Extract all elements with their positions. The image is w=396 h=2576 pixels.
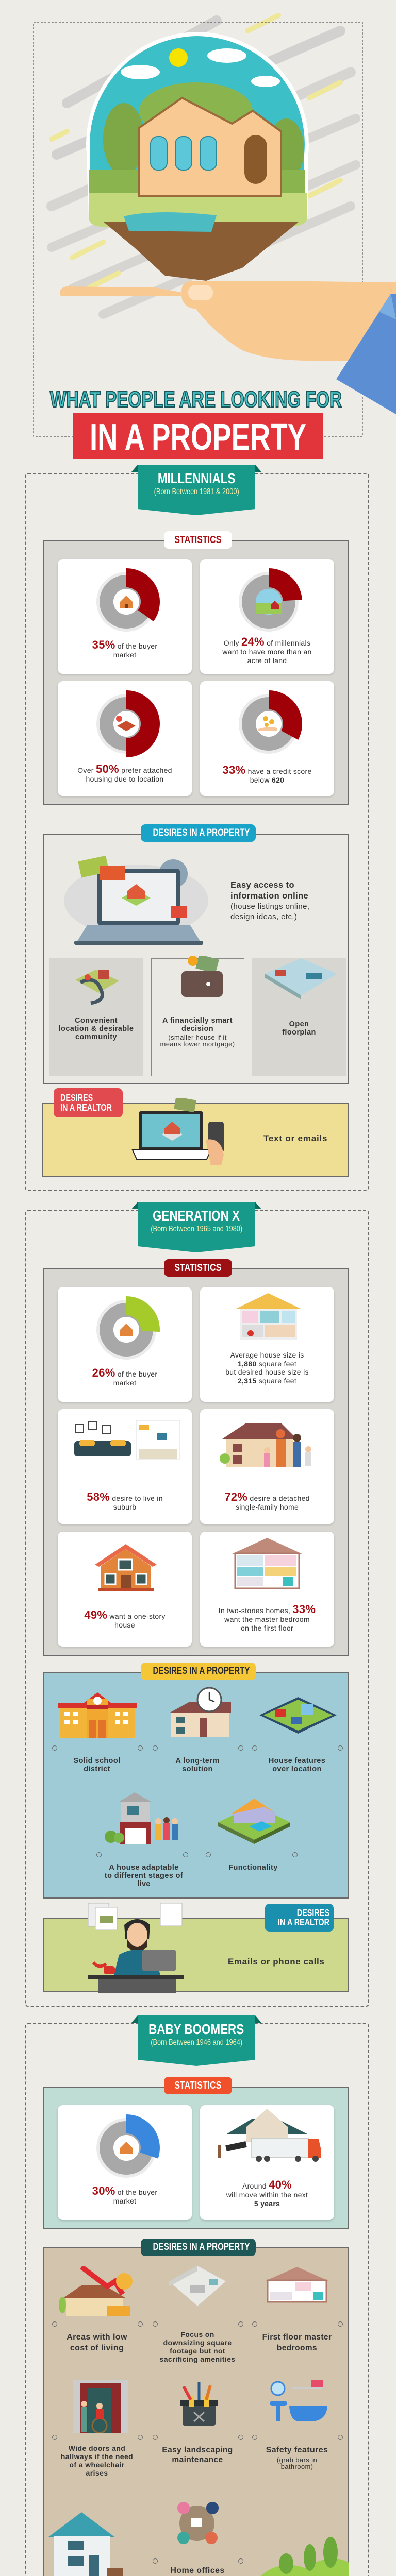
label: desires in a realtor (millennials): DESIRES [60, 1093, 93, 1103]
card: 40% move: 5 years [254, 2199, 280, 2208]
item: downsizing: sacrificing amenities [160, 2355, 235, 2363]
text: text or emails: Text or emails [263, 1133, 327, 1143]
item: low cost of living: Areas with low [67, 2333, 127, 2342]
item: downsizing: Focus on [180, 2330, 214, 2338]
label: desires in a realtor (gen x): DESIRES [297, 1908, 329, 1918]
panel: generation x [25, 1210, 369, 2007]
item: easy landscaping: Easy landscaping [162, 2446, 233, 2454]
label: desires in a property (gen x) [141, 1663, 256, 1680]
card: 72%: 72% desire a detached [224, 1490, 310, 1503]
panel: millennials [25, 473, 369, 1191]
item: low cost of living: cost of living [70, 2344, 124, 2352]
label: desires in a realtor (millennials) [54, 1088, 123, 1117]
item: wide doors: hallways if the need [61, 2452, 133, 2461]
card: house size: Average house size is [230, 1351, 304, 1359]
label: desires in a property (baby boomers) [141, 2239, 256, 2256]
card: 40% move: will move within the next [226, 2191, 308, 2199]
text: easy access: information online [230, 891, 308, 901]
item: downsizing [153, 2266, 243, 2363]
card: house size [200, 1287, 334, 1402]
text: easy access: Easy access to [230, 880, 294, 890]
label: desires in a property (millennials) [141, 824, 256, 842]
card: 50%: Over 50% prefer attached [77, 762, 172, 775]
item: easy landscaping [153, 2382, 243, 2464]
label: statistics (baby boomers) [164, 2077, 232, 2094]
item: safety features: bathroom) [281, 2463, 313, 2470]
icon: laptop and phone [132, 1098, 224, 1165]
item: open floorplan: Open [289, 1020, 309, 1028]
item: open floorplan [252, 958, 346, 1076]
item: adaptable house [96, 1792, 188, 1888]
panel: gen x desires in a realtor [43, 1918, 349, 1992]
item: financially smart [151, 958, 244, 1076]
item: long-term solution: A long-term [175, 1757, 220, 1765]
item: convenient location: Convenient [75, 1016, 118, 1025]
card: house size: 1,880 square feet [238, 1359, 296, 1367]
icon: house decoration [48, 2512, 123, 2576]
item: open floorplan: floorplan [282, 1028, 316, 1037]
item: safety features: Safety features [266, 2446, 328, 2454]
text: easy access [230, 880, 309, 921]
item: first floor master: bedrooms [277, 2344, 317, 2352]
item: convenient location: location & desirable [59, 1025, 134, 1033]
panel: millennials desires in a property [43, 834, 349, 1084]
label: desires in a property (millennials): DESIRES IN A PROPERTY [153, 827, 250, 838]
label: statistics (millennials): STATISTICS [175, 534, 221, 546]
item: convenient location [50, 958, 143, 1076]
item: downsizing: downsizing square [163, 2338, 232, 2347]
item: financially smart: (smaller house if it [168, 1033, 227, 1041]
item: long-term solution: solution [182, 1765, 213, 1773]
banner: generation x: (Born Between 1965 and 1980) [151, 1225, 242, 1233]
panel: baby boomers statistics [43, 2087, 349, 2229]
card: 50% [58, 681, 192, 796]
card: 26% [58, 1287, 192, 1402]
card: 72% [200, 1409, 334, 1524]
icon: trees decoration [261, 2537, 349, 2576]
text: easy access: (house listings online, [230, 902, 309, 911]
card: 35%: 35% of the buyer [92, 638, 157, 651]
card: 30%: 30% of the buyer [92, 2184, 157, 2197]
item: adaptable house: to different stages of [105, 1872, 183, 1880]
card: 26%: 26% of the buyer [92, 1366, 157, 1379]
item: adaptable house: live [137, 1880, 151, 1888]
item: solid school district: district [84, 1765, 110, 1773]
item: downsizing: footage but not [170, 2347, 225, 2355]
card: house size: but desired house size is [225, 1368, 309, 1376]
text: emails or phone calls: Emails or phone calls [228, 1957, 324, 1967]
item: home offices [153, 2502, 243, 2575]
card: 40% move [200, 2105, 334, 2220]
item: house features: House features [269, 1757, 325, 1765]
label: desires in a property (gen x): DESIRES IN A PROPERTY [153, 1666, 250, 1676]
banner: baby boomers: (Born Between 1946 and 1964) [151, 2038, 242, 2047]
item: house features: over location [272, 1765, 322, 1773]
card: 24%: Only 24% of millennials [224, 635, 310, 648]
label: statistics (gen x): STATISTICS [175, 1262, 221, 1274]
item: solid school district: Solid school [73, 1757, 121, 1765]
panel: baby boomers [25, 2023, 369, 2576]
card: house size: 2,315 square feet [238, 1377, 296, 1385]
title [50, 387, 342, 459]
item: house features [252, 1697, 343, 1773]
label: statistics (gen x) [164, 1259, 232, 1277]
item: home offices: Home offices [170, 2566, 225, 2575]
item: easy landscaping: maintenance [172, 2455, 223, 2464]
panel: generation x statistics [43, 1268, 349, 1656]
card: 49% [58, 1532, 192, 1647]
item: functionality [206, 1799, 298, 1872]
card: 49%: house [114, 1621, 135, 1629]
hand [60, 281, 396, 414]
panel: baby boomers desires in a property [43, 2247, 349, 2576]
card: 33% [200, 681, 334, 796]
panel: millennials desires in a realtor [42, 1103, 349, 1177]
item: first floor master: First floor master [262, 2333, 332, 2342]
card: 49%: 49% want a one-story [84, 1608, 166, 1621]
label: statistics (baby boomers): STATISTICS [175, 2080, 221, 2091]
item: financially smart: A financially smart [162, 1016, 233, 1025]
card: 30% [58, 2105, 192, 2220]
item: wide doors: Wide doors and [69, 2444, 125, 2452]
text: easy access: design ideas, etc.) [230, 912, 297, 921]
card: 24%: want to have more than an [222, 648, 312, 656]
panel: gen x desires in a property [43, 1672, 349, 1899]
item: first floor master [252, 2267, 343, 2352]
card: 50%: housing due to location [86, 775, 163, 783]
banner: millennials [131, 465, 261, 515]
item: wide doors: of a wheelchair [69, 2461, 125, 2469]
card: 33% master bedroom: want the master bedroom [224, 1615, 310, 1623]
panel: millennials statistics [43, 540, 349, 805]
item: convenient location: community [75, 1033, 117, 1041]
item: safety features [252, 2380, 343, 2470]
card: 33%: 33% have a credit score [222, 764, 312, 776]
card: 24%: acre of land [248, 656, 287, 665]
item: financially smart: decision [182, 1025, 213, 1033]
label: desires in a property (baby boomers): DESIRES IN A PROPERTY [153, 2242, 250, 2252]
card: 33% master bedroom: on the first floor [241, 1624, 293, 1632]
card: 58% [58, 1409, 192, 1524]
banner: millennials: MILLENNIALS [158, 470, 235, 486]
card: 33%: below 620 [250, 776, 284, 784]
card: 58%: 58% desire to live in [87, 1490, 163, 1503]
item: low cost of living [52, 2266, 143, 2352]
card: 24% [200, 559, 334, 674]
item: functionality: Functionality [228, 1863, 278, 1872]
banner: generation x [131, 1202, 261, 1252]
item: adaptable house: A house adaptable [109, 1863, 179, 1872]
banner: baby boomers: BABY BOOMERS [148, 2021, 244, 2037]
icon: laptop with listings [64, 855, 208, 945]
card: 30%: market [113, 2197, 136, 2205]
card: 33% master bedroom: In two-stories homes, 33% [219, 1603, 316, 1616]
label: statistics (millennials) [164, 531, 232, 549]
item: safety features: (grab bars in [277, 2456, 317, 2464]
item: solid school district [52, 1692, 143, 1773]
item: wide doors: arises [86, 2469, 108, 2477]
card: 33% master bedroom [200, 1532, 334, 1647]
icon: realtor at desk [88, 1903, 184, 1993]
banner: generation x: GENERATION X [153, 1208, 240, 1224]
label: desires in a realtor (gen x) [265, 1904, 334, 1932]
card: 35% [58, 559, 192, 674]
header illustration [33, 13, 396, 437]
item: wide doors [52, 2380, 143, 2477]
card: 35%: market [113, 651, 136, 659]
card: 72%: single-family home [236, 1503, 299, 1511]
card: 58%: suburb [113, 1503, 136, 1511]
item: long-term solution [153, 1687, 243, 1773]
banner: millennials: (Born Between 1981 & 2000) [154, 487, 239, 496]
item: financially smart: means lower mortgage) [160, 1040, 235, 1048]
globe [86, 32, 309, 281]
label: desires in a realtor (millennials): IN A REALTOR [60, 1103, 112, 1113]
card: 40% move: Around 40% [242, 2178, 292, 2191]
card: 26%: market [113, 1379, 136, 1387]
banner: baby boomers [131, 2015, 261, 2066]
label: desires in a realtor (gen x): IN A REALTOR [278, 1917, 329, 1927]
